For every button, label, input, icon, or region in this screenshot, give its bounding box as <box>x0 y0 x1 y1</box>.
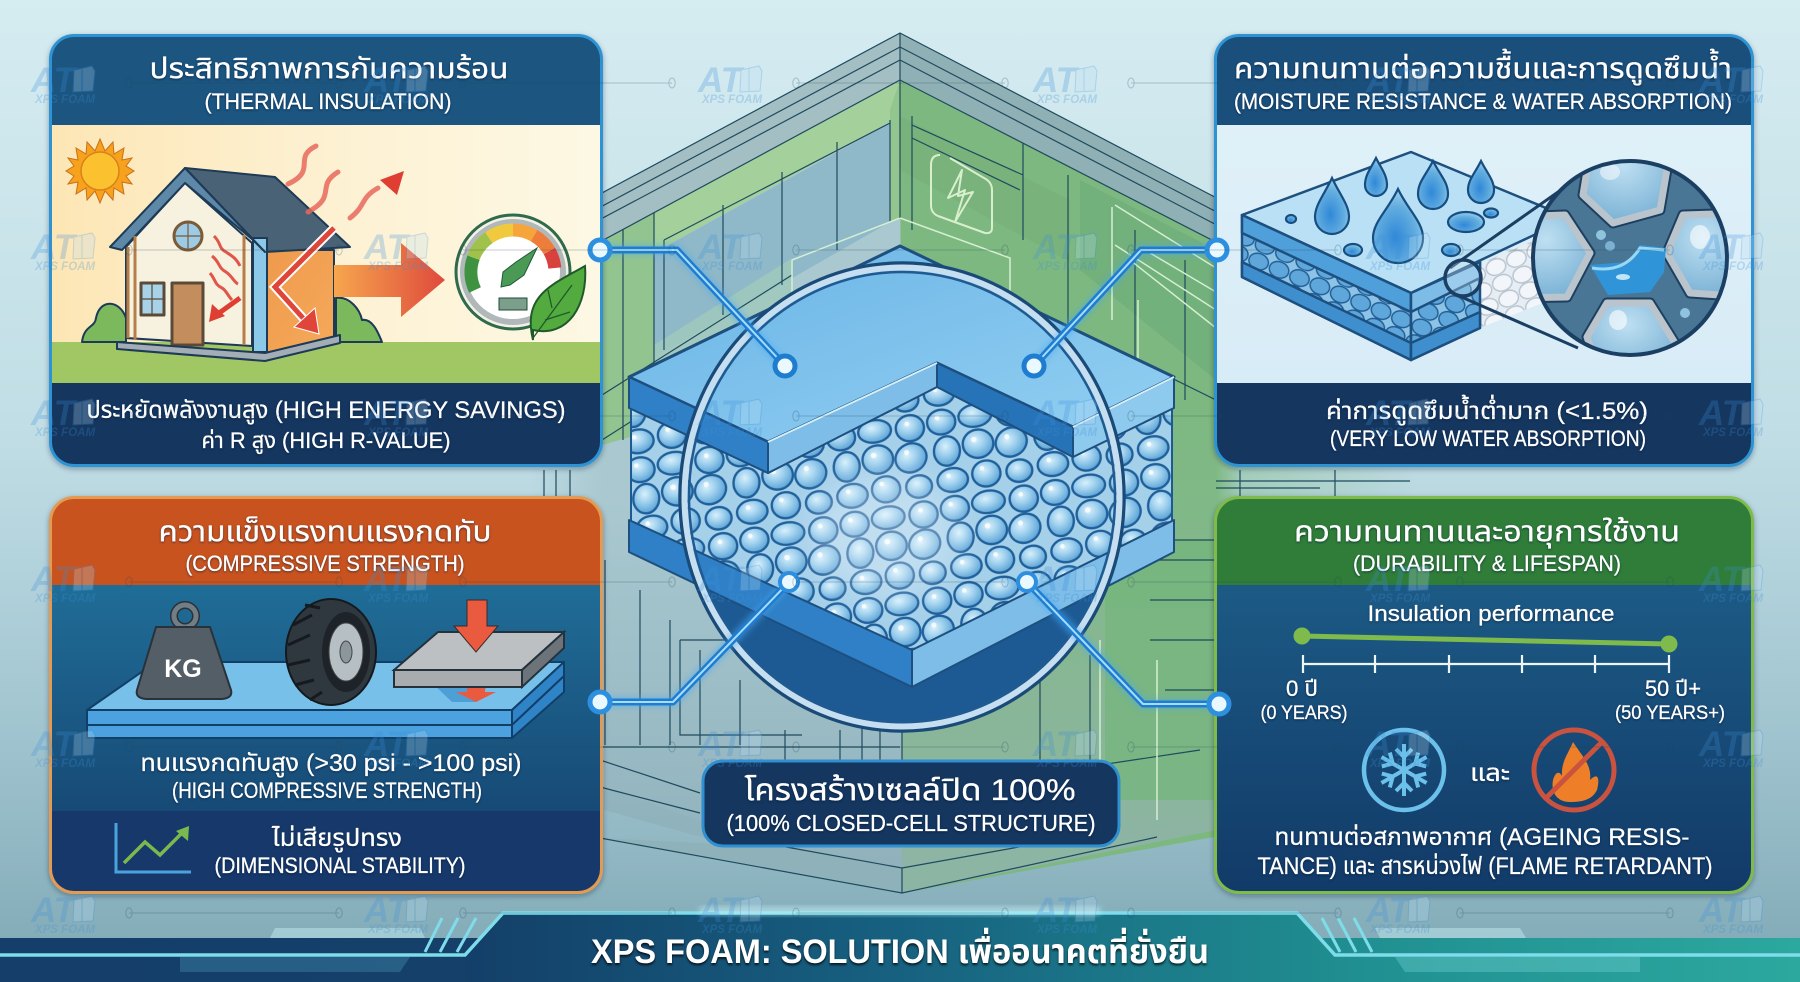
right facade <box>900 80 1420 893</box>
watermark grid: AT <box>1698 228 1746 267</box>
watermark grid: AT <box>697 228 745 267</box>
connector: moisture <box>1024 240 1227 376</box>
foam slab <box>87 662 564 738</box>
heading <box>1294 516 1680 576</box>
footer title: XPS FOAM: SOLUTION เพื่ออนาคตที่ยั่งยืน <box>591 927 1209 971</box>
water drops <box>1286 158 1498 263</box>
watermark grid: XPS FOAM <box>701 924 762 936</box>
panel: compressive strength <box>51 498 601 893</box>
center caption: โครงสร้างเซลล์ปิด 100% <box>744 774 1076 807</box>
watermark grid: XPS FOAM <box>1369 427 1430 439</box>
caption: ค่า R สูง (HIGH R-VALUE) <box>202 428 450 454</box>
watermark grid: AT <box>363 228 411 267</box>
watermark grid: XPS FOAM <box>701 261 762 273</box>
and label: และ <box>1470 760 1510 787</box>
watermark grid: XPS FOAM <box>1702 924 1763 936</box>
icon: weight: KG <box>164 655 202 683</box>
heading: (DURABILITY & LIFESPAN) <box>1353 551 1621 576</box>
watermark grid: AT <box>363 394 411 433</box>
top slab faces <box>629 363 1174 473</box>
watermark grid: XPS FOAM <box>1036 94 1097 106</box>
footer banner <box>0 907 1800 982</box>
watermark grid: XPS FOAM <box>1369 593 1430 605</box>
stability text <box>214 824 466 878</box>
side wall <box>267 250 334 353</box>
watermark grid: XPS FOAM <box>1702 758 1763 770</box>
magnified cell lens <box>1443 159 1729 357</box>
watermark grid: XPS FOAM <box>367 427 428 439</box>
connector: thermal insulation <box>590 240 795 376</box>
left facade <box>530 80 902 893</box>
heading: ความทนทานและอายุการใช้งาน <box>1294 516 1680 548</box>
heading <box>150 53 508 114</box>
watermark grid: AT <box>1032 228 1080 267</box>
watermark grid: AT <box>697 560 745 599</box>
timeline chart: 0 ปี <box>1286 676 1318 701</box>
foam cell core <box>631 385 1172 652</box>
gable trim <box>110 168 265 252</box>
panel: durability and lifespan <box>1216 498 1752 893</box>
watermark grid: XPS FOAM <box>701 94 762 106</box>
icon: house <box>82 168 382 361</box>
durability text: TANCE) และ สารหน่วงไฟ (FLAME RETARDANT) <box>1258 852 1712 880</box>
durability text <box>1258 823 1712 880</box>
watermark grid: AT <box>1698 61 1746 100</box>
heading: (MOISTURE RESISTANCE & WATER ABSORPTION) <box>1234 89 1732 114</box>
timeline chart: (0 YEARS) <box>1260 703 1348 724</box>
watermark grid: AT <box>30 394 78 433</box>
timeline chart <box>1260 601 1725 724</box>
footer side bands <box>0 928 1800 982</box>
icon: weight <box>137 605 231 699</box>
watermark grid: XPS FOAM <box>1036 261 1097 273</box>
watermark grid: AT <box>1698 891 1746 930</box>
watermark grid: AT <box>697 725 745 764</box>
watermark grid: XPS FOAM <box>1369 924 1430 936</box>
connector: compressive <box>590 573 798 712</box>
watermark grid: AT <box>697 61 745 100</box>
heading: ประสิทธิภาพการกันความร้อน <box>150 53 508 85</box>
stability text: ไม่เสียรูปทรง <box>271 824 402 853</box>
roof <box>185 168 350 252</box>
watermark grid: XPS FOAM <box>367 94 428 106</box>
icon: flame retardant <box>1534 730 1614 810</box>
watermark grid: XPS FOAM <box>1369 94 1430 106</box>
watermark grid: AT <box>697 394 745 433</box>
watermark grid: XPS FOAM <box>1369 758 1430 770</box>
heading: ความทนทานต่อความชื้นและการดูดซึมน้ำ <box>1234 48 1732 86</box>
watermark grid: AT <box>1032 891 1080 930</box>
watermark grid: XPS FOAM <box>34 593 95 605</box>
plinth <box>600 730 1157 893</box>
stability text: (DIMENSIONAL STABILITY) <box>214 853 466 878</box>
lens circle base <box>681 264 1123 730</box>
strength text: ทนแรงกดทับสูง (>30 psi - >100 psi) <box>140 750 522 778</box>
watermark grid: XPS FOAM <box>367 593 428 605</box>
watermark grid: AT <box>30 891 78 930</box>
watermark grid: XPS FOAM <box>34 261 95 273</box>
watermark grid: XPS FOAM <box>1702 261 1763 273</box>
icon: sun <box>66 139 134 203</box>
watermark grid: XPS FOAM <box>1036 427 1097 439</box>
big heat arrow <box>334 243 445 317</box>
watermark grid: AT <box>1365 394 1413 433</box>
insulation strip <box>253 238 267 352</box>
door <box>172 283 203 345</box>
icon: battery bolt <box>931 155 992 233</box>
center caption: (100% CLOSED-CELL STRUCTURE) <box>726 810 1096 836</box>
watermark grid: XPS FOAM <box>34 758 95 770</box>
watermark grid: XPS FOAM <box>34 924 95 936</box>
soft highlight on cells <box>810 473 960 597</box>
caption: ประหยัดพลังงานสูง (HIGH ENERGY SAVINGS) <box>86 397 566 425</box>
watermark grid: AT <box>1365 560 1413 599</box>
heat waves and arrows <box>209 146 404 334</box>
caption <box>86 397 566 454</box>
strength text: (HIGH COMPRESSIVE STRENGTH) <box>172 778 482 803</box>
footer center plate <box>465 914 1335 982</box>
watermark grid: XPS FOAM <box>701 593 762 605</box>
watermark grid: XPS FOAM <box>701 758 762 770</box>
watermark grid: AT <box>1032 560 1080 599</box>
caption: (VERY LOW WATER ABSORPTION) <box>1330 426 1646 451</box>
strength text <box>140 750 522 803</box>
bushes <box>82 304 126 342</box>
watermark grid: XPS FOAM <box>367 261 428 273</box>
panel: moisture resistance <box>1216 36 1752 465</box>
watermark grid: XPS FOAM <box>701 427 762 439</box>
watermark grid: XPS FOAM <box>34 94 95 106</box>
watermark grid: AT <box>363 891 411 930</box>
watermark grid: XPS FOAM <box>367 758 428 770</box>
round window <box>174 222 202 250</box>
heading: (COMPRESSIVE STRENGTH) <box>186 551 464 576</box>
watermark grid: XPS FOAM <box>1702 94 1763 106</box>
icon: tire <box>286 599 376 705</box>
watermark grid: XPS FOAM <box>34 427 95 439</box>
watermark grid: AT <box>1365 228 1413 267</box>
timeline chart: (50 YEARS+) <box>1615 703 1725 724</box>
heading: ความแข็งแรงทนแรงกดทับ <box>158 516 492 548</box>
watermark grid: AT <box>30 560 78 599</box>
foundation <box>117 335 340 361</box>
footer stripes <box>425 918 1372 952</box>
foam sample <box>1242 152 1570 360</box>
gauge with leaf <box>456 215 585 340</box>
icon: snowflake <box>1364 730 1444 810</box>
timeline chart: Insulation performance <box>1368 601 1614 626</box>
watermark grid: XPS FOAM <box>1702 593 1763 605</box>
heading <box>1234 48 1732 114</box>
icon: stability chart <box>116 823 191 872</box>
watermark grid: AT <box>1365 61 1413 100</box>
watermark grid: XPS FOAM <box>1702 427 1763 439</box>
watermark grid: AT <box>1032 725 1080 764</box>
watermark grid: AT <box>1032 394 1080 433</box>
watermark grid: AT <box>1698 394 1746 433</box>
watermark grid: AT <box>363 61 411 100</box>
building illustration <box>520 33 1420 893</box>
watermark grid: AT <box>1032 61 1080 100</box>
connector: durability <box>1018 573 1229 714</box>
central XPS foam block with lens <box>629 246 1174 731</box>
panel: thermal insulation <box>51 36 601 465</box>
front wall <box>126 183 252 346</box>
watermark grid: AT <box>697 891 745 930</box>
watermark grid: AT <box>30 725 78 764</box>
watermark grid: XPS FOAM <box>1036 593 1097 605</box>
heading <box>158 516 492 576</box>
connectors <box>590 240 1229 714</box>
watermark grid: XPS FOAM <box>1036 924 1097 936</box>
heading: (THERMAL INSULATION) <box>204 89 452 114</box>
caption <box>1326 394 1648 451</box>
caption: ค่าการดูดซึมน้ำต่ำมาก (<1.5%) <box>1326 394 1648 426</box>
watermark grid: AT <box>363 560 411 599</box>
square window <box>141 283 164 315</box>
watermark grid: AT <box>1365 725 1413 764</box>
watermark grid: AT <box>363 725 411 764</box>
center caption <box>703 761 1119 846</box>
durability text: ทนทานต่อสภาพอากาศ (AGEING RESIS- <box>1274 823 1690 851</box>
roof <box>520 33 1280 285</box>
watermark grid: AT <box>1698 725 1746 764</box>
bottom slab <box>629 520 1174 687</box>
watermark grid: AT <box>30 228 78 267</box>
watermark grid: XPS FOAM <box>1369 261 1430 273</box>
icon: concrete with arrows <box>394 600 564 702</box>
top slab surface <box>629 246 1174 442</box>
watermark grid: AT <box>1698 560 1746 599</box>
timeline chart: 50 ปี+ <box>1645 676 1701 701</box>
watermark grid: AT <box>1365 891 1413 930</box>
lens ring <box>680 263 1124 731</box>
watermark grid: XPS FOAM <box>1036 758 1097 770</box>
watermark grid: XPS FOAM <box>367 924 428 936</box>
watermark grid: AT <box>30 61 78 100</box>
